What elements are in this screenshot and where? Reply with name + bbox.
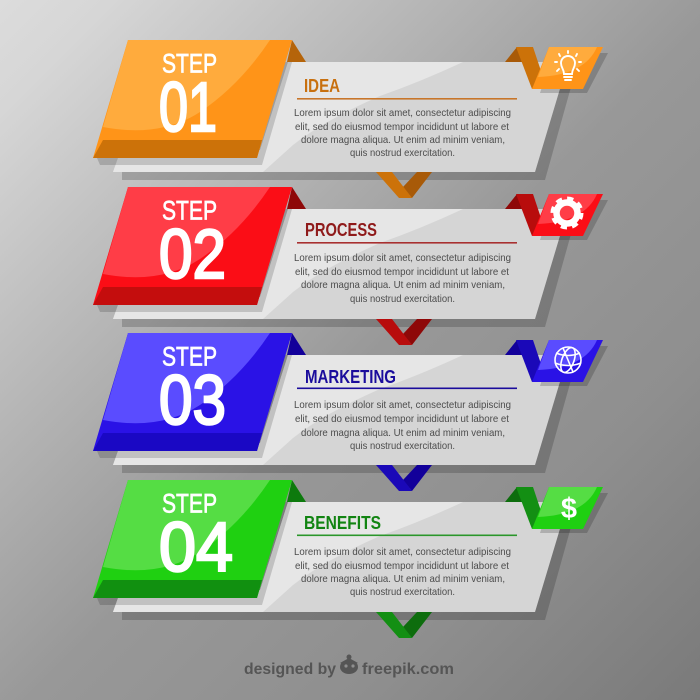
text panel: [113, 355, 568, 465]
body text: elit, sed do eiusmod tempor incididunt ut labore et: [295, 266, 509, 278]
card gloss: [103, 333, 270, 423]
card strip: [93, 580, 262, 598]
body text: quis nostrud exercitation.: [350, 586, 455, 598]
footer credit: freepik.com: [362, 661, 454, 678]
body text: quis nostrud exercitation.: [350, 147, 455, 159]
card gloss: [103, 187, 270, 277]
fold: [287, 333, 306, 355]
body text: dolore magna aliqua. Ut enim ad minim veniam,: [301, 573, 505, 585]
icon tag: [532, 194, 603, 236]
card strip: [93, 433, 262, 451]
icon: dollar: $: [561, 493, 577, 525]
step label: STEP: [162, 488, 217, 518]
card gloss: [103, 40, 270, 130]
footer credit: [244, 654, 454, 678]
body text: quis nostrud exercitation.: [350, 440, 455, 452]
icon tag: [532, 340, 603, 382]
body text: quis nostrud exercitation.: [350, 293, 455, 305]
body text: [294, 252, 511, 305]
step 3 unit: [93, 333, 608, 491]
step card: [93, 480, 292, 598]
panel shadow: [122, 355, 578, 473]
body text: elit, sed do eiusmod tempor incididunt ut labore et: [295, 560, 509, 572]
heading: BENEFITS: [304, 513, 381, 533]
panel shadow: [122, 209, 578, 327]
icon shadow: [540, 200, 608, 240]
body text: Lorem ipsum dolor sit amet, consectetur adipiscing: [294, 252, 511, 264]
card strip: [93, 140, 262, 158]
chevron down: [376, 319, 432, 345]
icon shadow: [540, 493, 608, 533]
icon shadow: [540, 346, 608, 386]
body text: Lorem ipsum dolor sit amet, consectetur adipiscing: [294, 546, 511, 558]
step label: STEP: [162, 342, 217, 372]
icon: light bulb: [555, 51, 581, 80]
heading rule: [297, 98, 517, 100]
step number: 03: [159, 361, 226, 439]
chevron down: [376, 465, 432, 491]
heading rule: [297, 388, 517, 389]
icon gloss: [538, 194, 597, 224]
ribbon: [505, 487, 542, 529]
heading rule: [297, 534, 517, 536]
card shadow: [97, 62, 292, 165]
step label: STEP: [162, 48, 217, 78]
card shadow: [97, 355, 292, 458]
body text: [294, 107, 511, 159]
step 4 unit: [93, 480, 608, 638]
step label: STEP: [162, 196, 217, 226]
step number: 01: [159, 68, 217, 146]
icon: freepik logo: [340, 654, 358, 674]
footer credit: designed by: [244, 661, 336, 678]
body text: Lorem ipsum dolor sit amet, consectetur adipiscing: [294, 107, 511, 119]
fold: [287, 480, 306, 502]
ribbon: [505, 194, 542, 236]
panel highlight: [113, 62, 463, 172]
body text: dolore magna aliqua. Ut enim ad minim veniam,: [301, 134, 505, 146]
panel shadow: [122, 62, 578, 180]
fold: [287, 187, 306, 209]
body text: dolore magna aliqua. Ut enim ad minim veniam,: [301, 427, 505, 439]
icon gloss: [538, 47, 597, 77]
step card: [93, 40, 292, 158]
heading: MARKETING: [305, 367, 396, 387]
icon gloss: [538, 340, 597, 370]
step 1 unit: [93, 40, 608, 198]
heading rule: [297, 242, 517, 244]
icon tag: [532, 47, 603, 89]
step number: 02: [159, 215, 226, 293]
card shadow: [97, 209, 292, 312]
heading: IDEA: [304, 76, 340, 96]
body text: elit, sed do eiusmod tempor incididunt ut labore et: [295, 121, 509, 133]
ribbon: [505, 340, 542, 382]
step 2 unit: [93, 187, 608, 345]
step number: 04: [159, 508, 233, 586]
panel highlight: [113, 209, 463, 319]
ribbon: [505, 47, 542, 89]
panel shadow: [122, 502, 578, 620]
body text: dolore magna aliqua. Ut enim ad minim veniam,: [301, 279, 505, 291]
icon tag: [532, 487, 603, 529]
card shadow: [97, 502, 292, 605]
card gloss: [103, 480, 270, 570]
fold: [287, 40, 306, 62]
icon: globe: [555, 346, 581, 374]
chevron down: [376, 612, 432, 638]
body text: [294, 399, 511, 452]
card strip: [93, 287, 262, 305]
text panel: [113, 62, 568, 172]
icon gloss: [538, 487, 597, 517]
heading: PROCESS: [305, 220, 377, 240]
icon shadow: [540, 53, 608, 93]
step card: [93, 187, 292, 305]
body text: [294, 546, 511, 598]
text panel: [113, 209, 568, 319]
panel highlight: [113, 502, 463, 612]
text panel: [113, 502, 568, 612]
chevron down: [376, 172, 432, 198]
body text: Lorem ipsum dolor sit amet, consectetur adipiscing: [294, 399, 511, 411]
icon: gear: [553, 199, 581, 227]
step card: [93, 333, 292, 451]
panel highlight: [113, 355, 463, 465]
body text: elit, sed do eiusmod tempor incididunt ut labore et: [295, 413, 509, 425]
